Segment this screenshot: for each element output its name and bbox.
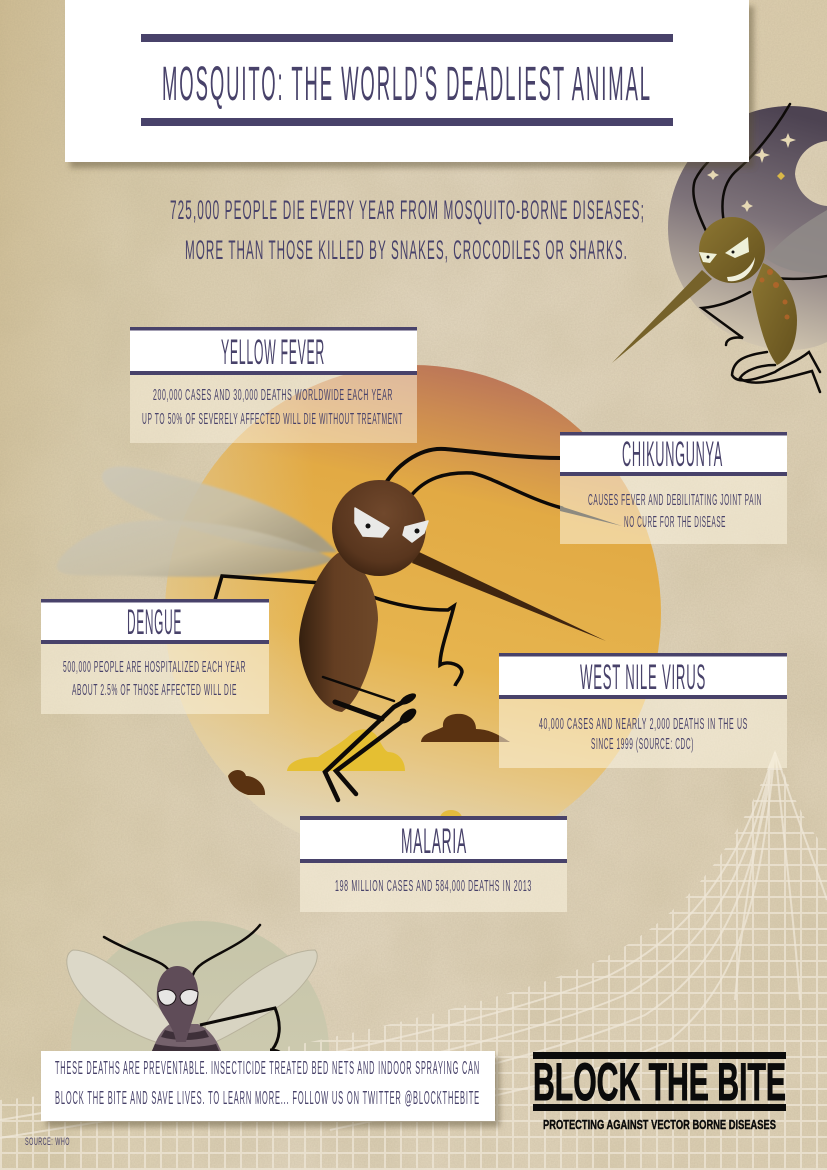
subtitle — [170, 195, 645, 265]
left arm — [215, 576, 322, 600]
panel: malaria: MALARIA — [401, 822, 467, 861]
cloud: yellow — [287, 729, 405, 771]
body — [299, 553, 378, 712]
arm — [200, 1008, 284, 1060]
wings — [67, 950, 172, 1045]
panel: malaria — [300, 816, 567, 912]
panel: yellow fever: YELLOW FEVER — [221, 333, 325, 372]
antenna tip over chikungunya panel — [560, 506, 622, 526]
head — [157, 966, 198, 1042]
logo: block the bite — [533, 1052, 786, 1132]
cloud: small yellow — [440, 810, 462, 826]
head — [699, 217, 765, 283]
body — [752, 263, 797, 365]
title panel — [65, 0, 749, 162]
bottom-left mosquito — [67, 925, 317, 1060]
stars — [707, 133, 796, 212]
panel: dengue: DENGUE — [127, 603, 182, 642]
moon — [668, 106, 827, 350]
body — [150, 1024, 224, 1060]
footer message panel — [41, 1051, 495, 1121]
spots — [760, 269, 790, 320]
face — [699, 237, 755, 281]
green circle behind small mosquito — [71, 921, 329, 1170]
head — [332, 480, 426, 576]
cloud: brown — [421, 714, 510, 742]
cloud: small brown — [228, 770, 265, 795]
panel: yellow fever — [130, 327, 417, 443]
text: UP TO 50% OF SEVERELY AFFECTED WILL DIE WITHOUT TREATMENT — [142, 411, 403, 428]
eyes — [158, 989, 198, 1005]
antennae — [693, 104, 790, 233]
antennae — [104, 925, 260, 975]
sun circle — [165, 365, 661, 861]
legs — [702, 276, 827, 392]
proboscis — [412, 551, 606, 641]
panel: west nile virus — [499, 653, 787, 768]
wings — [57, 467, 337, 577]
rear legs — [323, 677, 412, 800]
bed net — [0, 740, 827, 1170]
panel: chikungunya — [560, 432, 787, 544]
feet — [397, 691, 419, 726]
panel: malaria: 198 MILLION CASES AND 584,000 DEATHS IN 2013 — [335, 878, 532, 895]
main mosquito — [57, 449, 606, 800]
text: ABOUT 2.5% OF THOSE AFFECTED WILL DIE — [72, 682, 237, 699]
panel: dengue — [41, 599, 269, 714]
proboscis — [612, 270, 712, 363]
right arm — [370, 596, 462, 686]
text: 200,000 CASES AND 30,000 DEATHS WORLDWIDE EACH YEAR — [153, 387, 393, 404]
antennae — [381, 449, 562, 508]
stripes — [151, 1030, 220, 1056]
text: SOURCE: WHO — [25, 1136, 70, 1148]
wing — [766, 210, 827, 273]
moon circle with mosquito — [612, 104, 827, 392]
text: 500,000 PEOPLE ARE HOSPITALIZED EACH YEAR — [63, 659, 246, 676]
eyes — [355, 508, 428, 542]
